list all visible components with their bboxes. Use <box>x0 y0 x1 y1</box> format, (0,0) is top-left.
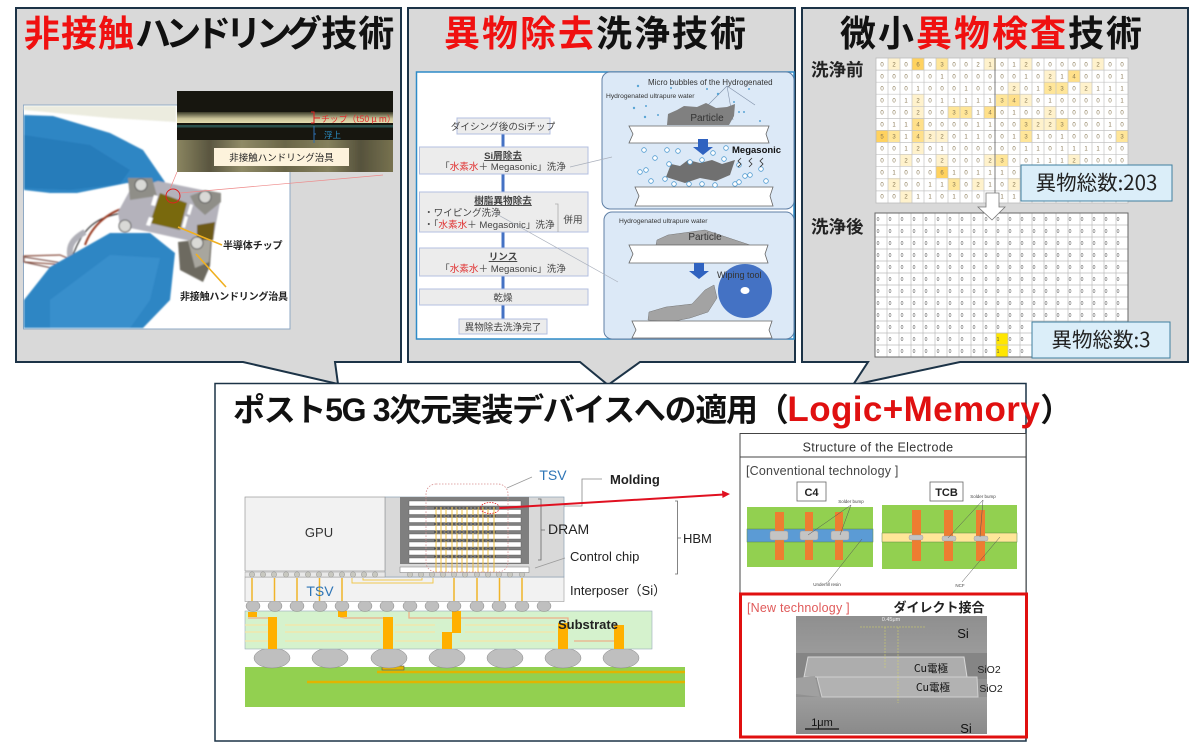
map: before cleaning: 010006101110 <box>880 170 1016 176</box>
SEM image: SiO2 <box>979 683 1003 695</box>
map: before cleaning: 011400001100322300010 <box>880 122 1124 128</box>
arrow: to jig <box>196 254 226 287</box>
map: before cleaning: 002002000230011120000 <box>880 158 1124 164</box>
diagram: megasonic cleaning: Hydrogenated ultrapure water <box>606 93 695 100</box>
step: resin particle removal: 樹脂異物除去 <box>474 195 532 207</box>
label: TCB: TCB <box>935 487 958 499</box>
diagram: megasonic cleaning: Micro bubbles of the Hydrogenated <box>648 78 773 87</box>
map: after cleaning <box>875 213 1128 357</box>
diagram: megasonic cleaning <box>602 72 794 209</box>
heading: application to post-5G 3D devices: ポスト5G 3次元実装デバイスへの適用（Logic+Memory） <box>233 390 1071 429</box>
particle peeled <box>648 285 717 322</box>
map: before cleaning: 531422011001310100003 <box>880 134 1124 140</box>
step: resin particle removal: 併用 <box>563 214 583 226</box>
label: after cleaning: 洗浄後 <box>811 214 864 239</box>
callout: total particles 203 <box>1021 165 1172 201</box>
GPU chip <box>245 497 385 571</box>
magnifier circle <box>166 189 180 203</box>
label: non-contact handling jig: 非接触ハンドリング治具 <box>180 288 288 303</box>
DRAM bracket and label <box>538 499 589 560</box>
TSV highlight outline <box>426 484 508 572</box>
arrow: before to after <box>978 193 1005 220</box>
diagram: TCB: NCF <box>955 583 965 588</box>
map: after cleaning: 000000000000000000000 <box>877 253 1120 259</box>
step: resin particle removal: ・「水素水＋ Megasonic」洗浄 <box>424 219 555 231</box>
flow chart <box>420 118 588 334</box>
map: before cleaning: 020603002101200000200 <box>880 62 1124 68</box>
map: after cleaning: 000000000000000000000 <box>877 217 1120 223</box>
label: new technology: [New technology ] <box>747 601 850 615</box>
BGA solder balls <box>254 648 639 668</box>
particle before <box>667 103 735 125</box>
step: complete <box>459 319 547 334</box>
diagram: TCB: Solder bump <box>970 494 996 499</box>
panel: post-5G application <box>215 384 1071 741</box>
step: drying <box>420 289 588 305</box>
arrow: wipe down <box>689 263 709 279</box>
map: after cleaning: 00000000001000 <box>877 337 1036 343</box>
diagram: TCB <box>882 494 1017 588</box>
SEM image: Cu電極 <box>916 680 950 695</box>
map: after cleaning: 00000000000000 <box>877 325 1036 331</box>
inset micrograph <box>177 91 396 172</box>
diagram: wiping cleaning: Particle <box>688 232 722 243</box>
label: before cleaning: 洗浄前 <box>811 57 864 82</box>
step: rinse: リンス <box>489 252 517 263</box>
step: rinse: 「水素水＋ Megasonic」洗浄 <box>440 263 566 275</box>
diagram: megasonic cleaning: Megasonic <box>732 145 781 156</box>
white content area <box>416 72 794 339</box>
HBM bracket and label <box>675 501 712 574</box>
particle lifted <box>666 160 735 183</box>
interposer <box>245 577 564 602</box>
wiping tool <box>718 264 772 318</box>
callout: total particles 3 <box>1032 322 1170 358</box>
inset micrograph: チップ（t50 μ m） <box>321 112 396 125</box>
label: conventional technology: [Conventional technology ] <box>746 464 899 478</box>
label: C4: C4 <box>804 487 819 499</box>
step: drying: 乾燥 <box>493 292 513 304</box>
label: C4 <box>797 482 826 501</box>
SEM image: Si <box>957 626 969 641</box>
map: after cleaning: 000000000000000000000 <box>877 301 1120 307</box>
step: resin particle removal <box>420 192 588 232</box>
step: Si debris removal <box>420 147 588 174</box>
step: rinse <box>420 248 588 276</box>
map: after cleaning: 000000000000000000000 <box>877 289 1120 295</box>
map: after cleaning: 000000000000000000000 <box>877 277 1120 283</box>
SEM image: Si <box>960 721 972 736</box>
label: Molding: Molding <box>610 472 660 487</box>
map: after cleaning: 000000000000000000000 <box>877 229 1120 235</box>
inset micrograph: 非接触ハンドリング治具 <box>229 150 334 164</box>
step: resin particle removal: ・ワイピング洗浄 <box>424 207 501 219</box>
label: interposer: Interposer（Si） <box>570 583 666 598</box>
step: diced Si chip: ダイシング後のSiチップ <box>451 121 556 133</box>
label: TSV upper: TSV <box>539 467 567 483</box>
diagram: megasonic cleaning: Particle <box>690 113 724 124</box>
SEM image <box>796 616 1003 736</box>
diagram: C4 <box>747 499 873 587</box>
bump highlight <box>480 502 500 514</box>
map: before cleaning <box>876 58 1128 203</box>
step: Si debris removal: Si屑除去 <box>484 150 522 162</box>
label: direct bonding: ダイレクト接合 <box>893 597 985 616</box>
map: after cleaning: 000000000000000000000 <box>877 313 1120 319</box>
heading: micro particle inspection technology: 微小異物検査技術 <box>840 13 1144 54</box>
label: semiconductor chip: 半導体チップ <box>223 237 282 252</box>
map: before cleaning: 000100010002013302111 <box>880 86 1124 92</box>
label: TCB <box>930 482 963 501</box>
substrate <box>245 611 652 649</box>
PCB <box>245 666 685 707</box>
panel: particle removal cleaning <box>408 8 795 385</box>
map: after cleaning: 000000000000000000000 <box>877 265 1120 271</box>
interposer balls <box>246 600 551 612</box>
GPU chip: GPU <box>305 525 333 540</box>
step: diced Si chip <box>451 118 556 134</box>
map: before cleaning: 001201111134201000001 <box>880 98 1124 104</box>
heading: structure of the electrode: Structure of the Electrode <box>803 440 953 454</box>
callout: total particles 3: 異物総数:3 <box>1051 323 1151 353</box>
diagram: C4: Solder bump <box>838 499 864 504</box>
label: TSV lower: TSV <box>306 583 334 599</box>
heading: particle removal cleaning technology: 異物除去洗浄技術 <box>444 13 748 54</box>
step: Si debris removal: 「水素水＋ Megasonic」洗浄 <box>440 161 566 173</box>
particle on chip <box>656 230 750 245</box>
map: after cleaning: 00000000001000 <box>877 349 1036 355</box>
map: before cleaning: 001201000000110111100 <box>880 146 1124 152</box>
SEM image: SiO2 <box>977 664 1001 676</box>
map: before cleaning: 000001000000102140001 <box>880 74 1124 80</box>
map: before cleaning: 000200331401002000000 <box>880 110 1124 116</box>
diagram: wiping cleaning: Hydrogenated ultrapure water <box>619 218 708 225</box>
SEM image: 1μm <box>811 717 833 729</box>
SEM image: 0.45μm <box>882 617 901 623</box>
label: substrate: Substrate <box>558 617 618 632</box>
SEM image: Cu電極 <box>914 661 948 676</box>
photo: gloved hand holding jig <box>24 105 383 329</box>
DRAM bracket and label: DRAM <box>548 521 589 537</box>
arrow: to chip <box>178 227 222 245</box>
package cross-section diagram <box>245 467 712 707</box>
diagram: C4: Underfill resin <box>813 582 841 587</box>
arrow: process down <box>693 139 713 155</box>
map: after cleaning: 000000000000000000000 <box>877 241 1120 247</box>
diagram: wiping cleaning <box>604 212 794 339</box>
DRAM stack <box>400 497 529 572</box>
micro bumps <box>245 572 525 577</box>
heading: non-contact handling technology: 非接触ハンドリング技術 <box>24 13 395 54</box>
panel: structure of the electrode <box>740 434 1026 736</box>
inset micrograph: 浮上 <box>324 129 342 141</box>
panel: particle inspection <box>802 8 1188 385</box>
panel: new technology <box>740 594 1026 737</box>
step: complete: 異物除去洗浄完了 <box>465 322 541 334</box>
map: before cleaning: 00211010011 <box>880 194 1016 200</box>
diagram: wiping cleaning: Wiping tool <box>717 270 762 280</box>
molding <box>385 497 564 577</box>
HBM bracket and label: HBM <box>683 531 712 546</box>
arrow: to electrode structure <box>500 490 730 508</box>
callout: total particles 203: 異物総数:203 <box>1036 166 1157 196</box>
label: control chip: Control chip <box>570 549 639 564</box>
map: before cleaning: 020011302102 <box>880 182 1016 188</box>
